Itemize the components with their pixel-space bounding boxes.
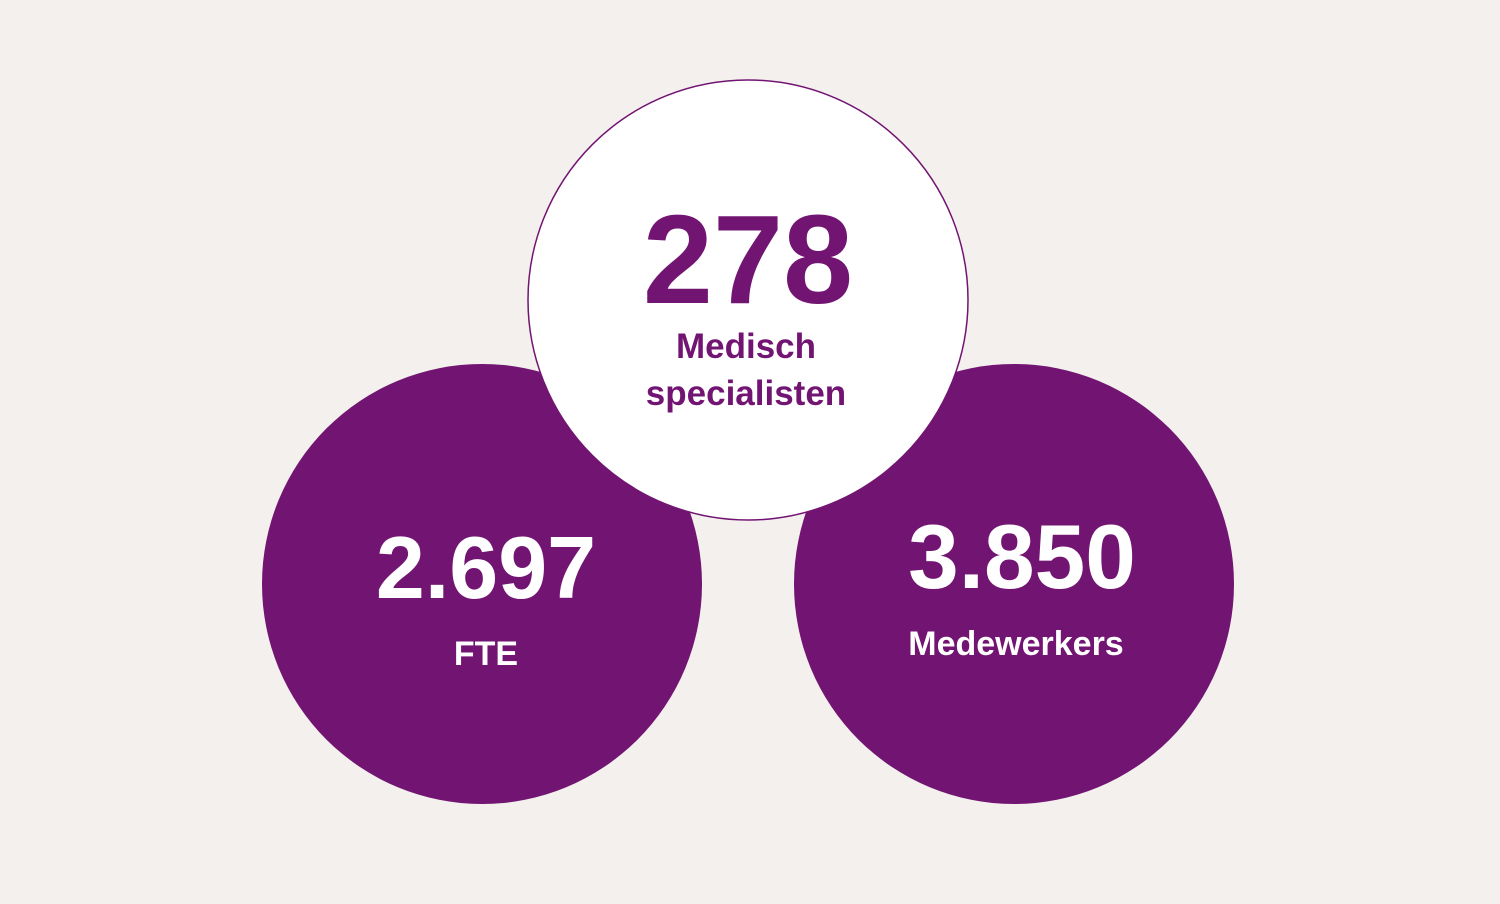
label: FTE: FTE (454, 635, 518, 673)
label: Medisch specialisten: specialisten (646, 374, 846, 413)
number: 3.850: 3.850 (908, 507, 1136, 608)
label: Medewerkers: Medewerkers (908, 625, 1124, 663)
panel: Medewerkers circle (794, 364, 1234, 804)
number: 278: 278 (643, 189, 853, 330)
label: Medisch specialisten: Medisch (676, 327, 816, 366)
panel: Medisch specialisten circle (528, 80, 968, 520)
panel: FTE circle (262, 364, 702, 804)
number: 2.697: 2.697 (376, 518, 596, 617)
